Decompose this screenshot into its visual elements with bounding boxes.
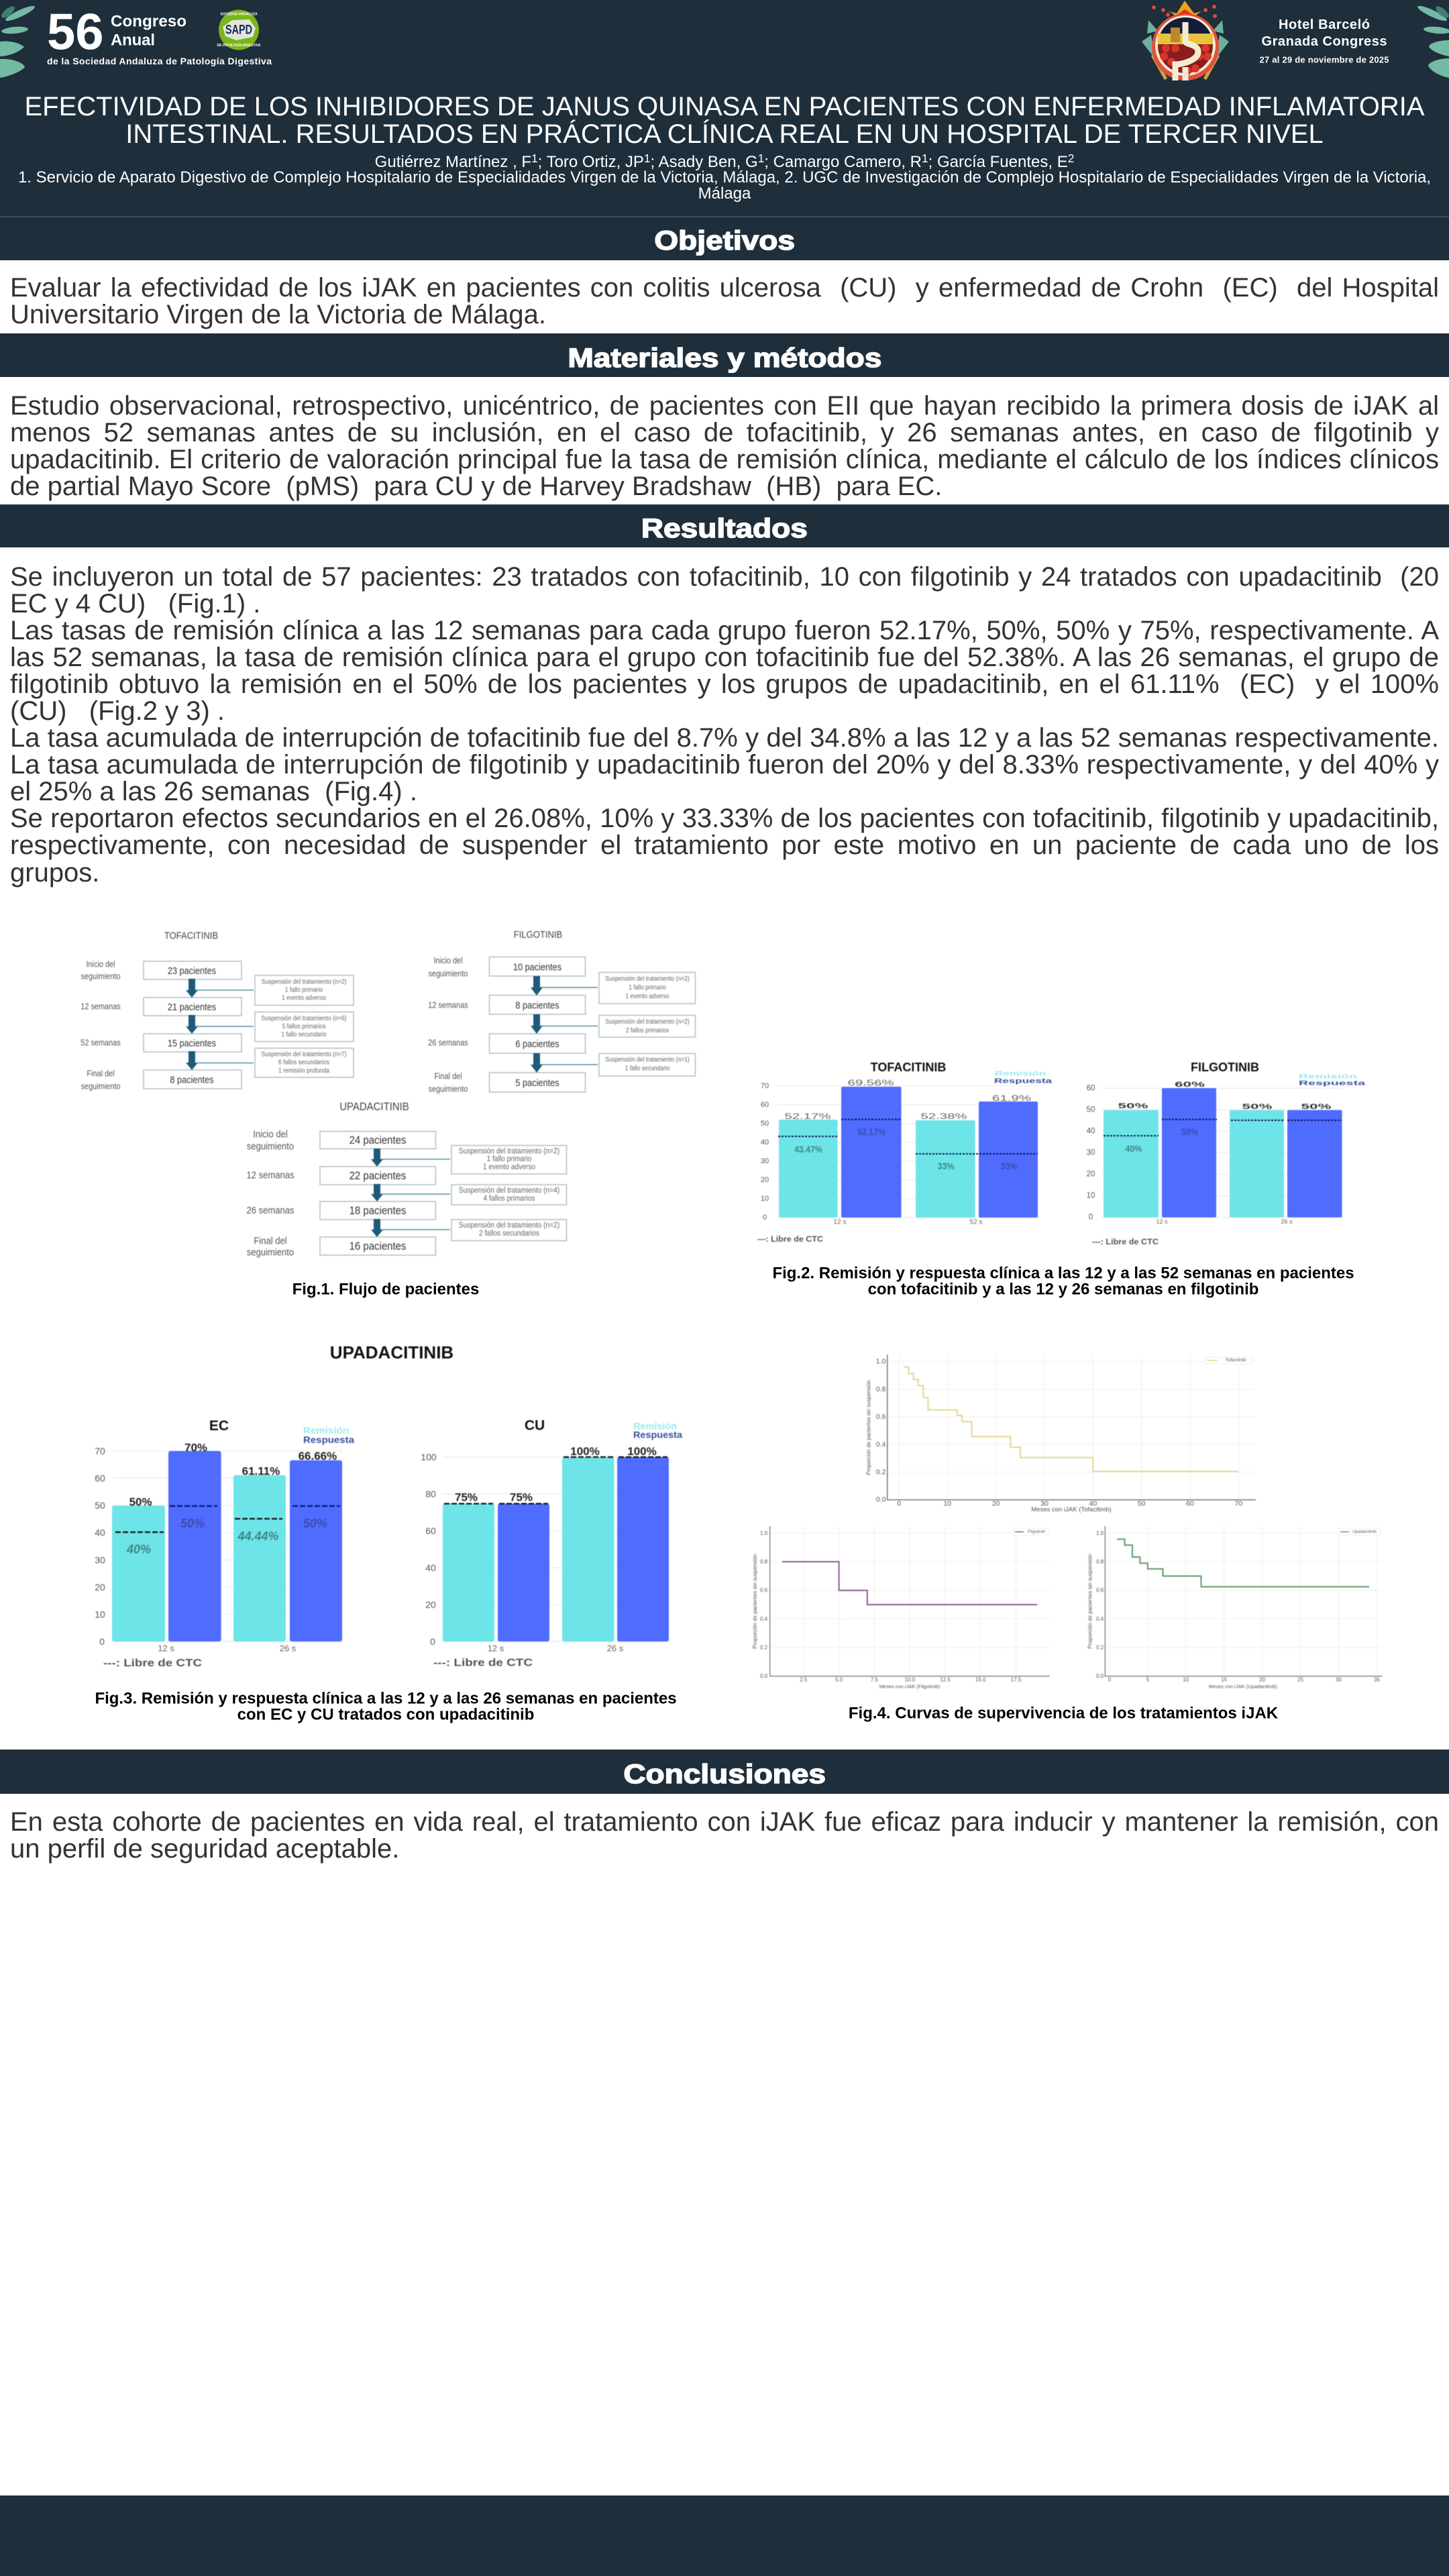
text: materiales y métodos — [10, 391, 1439, 501]
text: resultados: Se incluyeron un total de 57 pacientes: 23 tratados con tofacitinib, 10 con filgotinib y 24 tratados con upadacitinib (20 — [10, 562, 1439, 592]
chart: filgotinib: 50% — [1181, 1126, 1198, 1137]
flow: upadacitinib: 24 pacientes — [350, 1134, 406, 1146]
curve: filgotinib: 0.6 — [760, 1587, 768, 1593]
curve: tofacitinib: 0 — [897, 1500, 901, 1508]
chart: filgotinib — [1087, 1061, 1366, 1246]
curve: tofacitinib: 20 — [992, 1500, 1000, 1508]
text: objetivos — [10, 273, 1439, 329]
flow: tofacitinib: seguimiento — [81, 1081, 121, 1091]
chart: tofacitinib: 52.17% — [785, 1112, 831, 1121]
curve: upadacitinib: 35 — [1374, 1677, 1380, 1682]
curve: filgotinib: Proporción de pacientes sin suspensión — [752, 1554, 758, 1649]
figure 4: survival curves — [752, 1355, 1382, 1689]
flow: filgotinib: Suspensión del tratamiento (n=1) — [605, 1056, 690, 1064]
chart: filgotinib: 12 s — [1156, 1218, 1168, 1225]
text: resultados: La tasa acumulada de interrupción de tofacitinib fue del 8.7% y del 34.8% a las 12 y a las 52 semanas respectivamente. — [10, 723, 1439, 753]
flow: filgotinib: 10 pacientes — [513, 961, 561, 973]
header divider line — [0, 216, 1449, 217]
text: resultados: La tasa acumulada de interrupción de filgotinib y upadacitinib fueron del 20% y del 8.33% respectivamente, y del 40% y — [10, 750, 1439, 780]
heading: Conclusiones: Conclusiones — [623, 1760, 826, 1789]
caption: figure 3: Fig.3. Remisión y respuesta clínica a las 12 y a las 26 semanas en pacientes — [95, 1689, 677, 1708]
poster title — [24, 92, 1425, 149]
curve: upadacitinib: 1.0 — [1096, 1530, 1104, 1536]
flow: tofacitinib: 8 pacientes — [170, 1073, 214, 1085]
chart: tofacitinib: Remisión — [995, 1071, 1046, 1077]
text: materiales y métodos: upadacitinib. El criterio de valoración principal fue la tasa de remisión clínica, mediante el cálculo de los índices clínicos — [10, 445, 1439, 474]
chart: filgotinib: 50% — [1301, 1103, 1332, 1111]
text: resultados: EC y 4 CU) (Fig.1) . — [10, 589, 260, 619]
figure 2: tofacitinib and filgotinib bar charts — [757, 1061, 1366, 1246]
flow: filgotinib: 8 pacientes — [515, 999, 559, 1011]
chart: tofacitinib: TOFACITINIB — [871, 1061, 946, 1074]
curve: tofacitinib: 30 — [1040, 1500, 1049, 1508]
flow: upadacitinib: seguimiento — [247, 1246, 294, 1258]
text: materiales y métodos: Estudio observacional, retrospectivo, unicéntrico, de pacientes con EII que hayan recibido la primera dosis de iJAK al — [10, 391, 1439, 421]
curve: tofacitinib: 0.2 — [876, 1468, 885, 1476]
footer band — [0, 2496, 1449, 2576]
heading: Conclusiones — [0, 1750, 1449, 1794]
chart: CU: 12 s — [488, 1644, 504, 1653]
flow: tofacitinib: Suspensión del tratamiento (n=2) — [262, 978, 346, 986]
flow: tofacitinib: 5 fallos primarios — [282, 1022, 326, 1031]
logo: 56 Congreso Anual: Anual — [111, 31, 155, 50]
chart: filgotinib: 40% — [1126, 1143, 1142, 1154]
chart: CU: 20 — [425, 1599, 436, 1610]
flow: filgotinib: Final del — [434, 1071, 462, 1081]
curve: upadacitinib: 0.0 — [1096, 1673, 1104, 1679]
chart: tofacitinib: 60 — [761, 1101, 769, 1109]
chart: tofacitinib: 52 s — [970, 1218, 982, 1226]
flow: tofacitinib: 1 remisión profunda — [278, 1067, 330, 1075]
curve: upadacitinib: Meses con iJAK (Upadacitinib) — [1209, 1684, 1278, 1689]
curve: filgotinib: 5.0 — [835, 1677, 843, 1682]
curve: tofacitinib: 0.0 — [876, 1496, 885, 1504]
chart: filgotinib: 10 — [1087, 1192, 1095, 1200]
flow: tofacitinib: 21 pacientes — [168, 1001, 216, 1012]
curve: filgotinib: 0.2 — [760, 1645, 768, 1650]
curve: filgotinib: 2.5 — [800, 1677, 808, 1682]
chart: filgotinib: 60% — [1175, 1081, 1205, 1089]
text: resultados: respectivamente, con necesidad de suspender el tratamiento por este motivo en un paciente de cada uno de los — [10, 830, 1439, 860]
text: materiales y métodos: de partial Mayo Score (pMS) para CU y de Harvey Bradshaw (HB) para EC. — [10, 472, 942, 501]
flow: upadacitinib: seguimiento — [247, 1140, 294, 1152]
chart: CU: 75% — [455, 1491, 478, 1504]
chart: tofacitinib: 52.38% — [920, 1112, 967, 1121]
chart: EC: 50% — [303, 1517, 327, 1530]
chart: filgotinib: 50 — [1087, 1106, 1095, 1114]
curve: tofacitinib: Proporción de pacientes sin suspensión — [865, 1380, 872, 1475]
flow: upadacitinib: 18 pacientes — [350, 1205, 406, 1217]
chart: tofacitinib: Respuesta — [994, 1077, 1053, 1085]
chart: EC: 12 s — [158, 1644, 174, 1653]
chart: filgotinib: 26 s — [1281, 1218, 1293, 1225]
chart: CU: 0 — [430, 1636, 435, 1647]
chart: EC: 30 — [95, 1554, 105, 1565]
text: conclusiones: En esta cohorte de pacientes en vida real, el tratamiento con iJAK fue eficaz para inducir y mantener la remisión, con — [10, 1807, 1439, 1837]
text: resultados: (CU) (Fig.2 y 3) . — [10, 696, 225, 726]
curve: tofacitinib — [865, 1355, 1256, 1513]
chart: filgotinib: ---: Libre de CTC — [1092, 1237, 1159, 1246]
chart: CU: 100 — [421, 1452, 437, 1462]
flow: tofacitinib: Inicio del — [86, 959, 115, 969]
flow: tofacitinib: 1 evento adverso — [282, 994, 326, 1002]
chart: EC: 44.44% — [237, 1529, 279, 1543]
caption: figure 2 — [772, 1264, 1354, 1299]
curve: tofacitinib: 50 — [1138, 1500, 1146, 1508]
flow: upadacitinib: Final del — [254, 1234, 287, 1246]
flow: filgotinib: seguimiento — [429, 1083, 468, 1094]
flow: filgotinib: 5 pacientes — [515, 1077, 559, 1088]
affiliations: Málaga — [698, 184, 751, 203]
curve: upadacitinib: 15 — [1221, 1677, 1228, 1682]
curve: upadacitinib: 5 — [1146, 1677, 1150, 1682]
caption: figure 3: con EC y CU tratados con upadacitinib — [237, 1705, 534, 1724]
curve: upadacitinib: 25 — [1297, 1677, 1304, 1682]
chart: EC: 20 — [95, 1582, 105, 1593]
logo: SAPD: SOCIEDAD ANDALUZA — [220, 12, 258, 16]
curve: upadacitinib: 0.8 — [1096, 1559, 1104, 1564]
poster title: INTESTINAL. RESULTADOS EN PRÁCTICA CLÍNICA REAL EN UN HOSPITAL DE TERCER NIVEL — [125, 119, 1324, 149]
icon: left leaves — [0, 3, 36, 78]
chart: CU: 40 — [425, 1562, 436, 1573]
text: resultados: filgotinib obtuvo la remisión en el 50% de los pacientes y los grupos de upadacitinib, en el 61.11% (EC) y el 100% — [10, 669, 1439, 699]
curve: upadacitinib: 10 — [1183, 1677, 1189, 1682]
chart: CU: 100% — [627, 1445, 657, 1458]
flow: upadacitinib: 1 evento adverso — [483, 1163, 535, 1171]
chart: filgotinib: FILGOTINIB — [1191, 1061, 1259, 1074]
flow: upadacitinib: 26 semanas — [246, 1204, 294, 1216]
curve: tofacitinib: 0.4 — [876, 1440, 885, 1448]
curve: upadacitinib: Proporción de pacientes sin suspensión — [1087, 1554, 1093, 1649]
curve: filgotinib: 10.0 — [904, 1677, 916, 1682]
chart: tofacitinib: 69.56% — [848, 1078, 894, 1087]
curve: filgotinib: 0.4 — [760, 1616, 768, 1622]
flow: upadacitinib: 16 pacientes — [350, 1240, 406, 1252]
chart: tofacitinib: 12 s — [834, 1218, 846, 1226]
chart: EC: Remisión — [303, 1425, 349, 1436]
curve: upadacitinib: 30 — [1336, 1677, 1342, 1682]
text: resultados: grupos. — [10, 858, 99, 888]
chart: EC: 66.66% — [299, 1450, 337, 1462]
logo: 56 Congreso Anual — [47, 4, 272, 66]
curve: tofacitinib: 1.0 — [876, 1358, 885, 1366]
flow: upadacitinib: Suspensión del tratamiento (n=2) — [459, 1222, 559, 1230]
chart: EC: 40% — [126, 1543, 151, 1556]
flow: upadacitinib: 4 fallos primarios — [483, 1195, 535, 1203]
authors: Gutiérrez Martínez , F1; Toro Ortiz, JP1; Asady Ben, G1; Camargo Camero, R1; García Fuentes, E2 — [375, 152, 1074, 171]
chart: tofacitinib: 30 — [761, 1157, 769, 1165]
flow: tofacitinib: 52 semanas — [80, 1037, 121, 1048]
chart: tofacitinib: 61.9% — [992, 1093, 1032, 1103]
chart: EC: Respuesta — [303, 1434, 354, 1445]
flow: filgotinib: Suspensión del tratamiento (n=2) — [605, 975, 690, 983]
curve: filgotinib: 1.0 — [760, 1530, 768, 1536]
chart: tofacitinib: 50 — [761, 1120, 769, 1128]
flow: filgotinib: 1 fallo secundario — [625, 1065, 669, 1073]
text: materiales y métodos: menos 52 semanas antes de su inclusión, en el caso de tofacitinib, y 26 semanas antes, en caso de filgotinib y — [10, 418, 1439, 447]
flow: tofacitinib: seguimiento — [81, 971, 121, 981]
chart: tofacitinib: 20 — [761, 1176, 769, 1184]
chart: CU: ---: Libre de CTC — [433, 1657, 533, 1669]
curve: upadacitinib: Upadacitinib — [1352, 1529, 1377, 1534]
flow: upadacitinib: 12 semanas — [246, 1169, 294, 1181]
flow: tofacitinib: Suspensión del tratamiento (n=7) — [262, 1051, 346, 1059]
chart: filgotinib: 0 — [1089, 1214, 1093, 1222]
flow: tofacitinib: 12 semanas — [80, 1001, 121, 1012]
chart: filgotinib: 60 — [1087, 1084, 1095, 1092]
poster title: EFECTIVIDAD DE LOS INHIBIDORES DE JANUS QUINASA EN PACIENTES CON ENFERMEDAD INFLAMATORIA — [24, 92, 1425, 121]
icon: right leaves — [1416, 3, 1449, 78]
flow: upadacitinib — [246, 1101, 566, 1258]
flow: upadacitinib: 2 fallos secundarios — [479, 1230, 539, 1238]
chart: tofacitinib: 52.17% — [857, 1126, 885, 1137]
chart: tofacitinib: 33% — [1001, 1161, 1018, 1171]
curve: filgotinib: 15.0 — [975, 1677, 986, 1682]
curve: upadacitinib: 0 — [1108, 1677, 1112, 1682]
flow: filgotinib: 1 evento adverso — [625, 992, 669, 1001]
flow: upadacitinib: Suspensión del tratamiento (n=2) — [459, 1147, 559, 1156]
curve: tofacitinib: Tofacitinib — [1225, 1358, 1246, 1363]
chart: EC: 60 — [95, 1473, 105, 1484]
heading: upadacitinib: UPADACITINIB — [330, 1342, 453, 1362]
flow: upadacitinib: 22 pacientes — [350, 1170, 406, 1182]
chart: CU: 100% — [570, 1445, 600, 1458]
flow: tofacitinib: TOFACITINIB — [164, 929, 218, 941]
chart: EC: 50% — [129, 1496, 152, 1508]
flow: upadacitinib: UPADACITINIB — [339, 1101, 409, 1113]
chart: filgotinib: 40 — [1087, 1127, 1095, 1135]
flow: tofacitinib: Final del — [87, 1068, 115, 1079]
caption: figure 3 — [95, 1689, 677, 1724]
text: resultados: las 52 semanas, la tasa de remisión clínica para el grupo con tofacitinib fue del 52.38%. A las 26 semanas, el grupo de — [10, 643, 1439, 672]
chart: tofacitinib — [757, 1061, 1053, 1244]
chart: EC: ---: Libre de CTC — [103, 1658, 203, 1669]
curve: upadacitinib: 0.4 — [1096, 1616, 1104, 1622]
curve: filgotinib: 12.5 — [940, 1677, 951, 1682]
heading: Resultados — [0, 504, 1449, 547]
curve: filgotinib — [752, 1526, 1050, 1689]
curve: tofacitinib: 0.8 — [876, 1385, 885, 1393]
flow: tofacitinib — [80, 929, 354, 1091]
curve: tofacitinib: 10 — [943, 1500, 951, 1508]
logo: 56 Congreso Anual: 56 — [47, 4, 104, 60]
curve: tofacitinib: 60 — [1186, 1500, 1194, 1508]
heading: Objetivos: Objetivos — [654, 226, 795, 256]
curve: filgotinib: 0.0 — [760, 1673, 768, 1679]
venue and dates — [1260, 17, 1389, 64]
flow: tofacitinib: 1 fallo secundario — [281, 1030, 327, 1039]
chart: filgotinib: Respuesta — [1299, 1080, 1366, 1087]
chart: CU: 75% — [510, 1491, 533, 1504]
chart: tofacitinib: 70 — [761, 1082, 769, 1090]
caption: figure 4: Fig.4. Curvas de supervivencia de los tratamientos iJAK — [849, 1704, 1279, 1723]
flow: filgotinib: 6 pacientes — [515, 1038, 559, 1049]
text: objetivos: Universitario Virgen de la Victoria de Málaga. — [10, 300, 546, 329]
chart: filgotinib: 50% — [1242, 1103, 1273, 1111]
chart: tofacitinib: ---: Libre de CTC — [757, 1234, 823, 1244]
flow: filgotinib: seguimiento — [429, 968, 468, 979]
heading: Materiales y métodos: Materiales y métodos — [568, 343, 881, 373]
chart: CU: CU — [525, 1418, 545, 1433]
text: resultados: Las tasas de remisión clínica a las 12 semanas para cada grupo fueron 52.17%, 50%, 50% y 75%, respectivamente. A — [10, 616, 1439, 645]
curve: upadacitinib: 0.6 — [1096, 1587, 1104, 1593]
logo: SAPD: SAPD — [225, 23, 252, 38]
figure 1: patient flow — [80, 928, 695, 1258]
flow: filgotinib: 1 fallo primario — [629, 983, 666, 992]
chart: EC: 40 — [95, 1527, 105, 1538]
chart: EC — [95, 1418, 354, 1669]
logo: 56 Congreso Anual: Congreso — [111, 12, 186, 31]
chart: CU: 60 — [425, 1525, 436, 1536]
curve: tofacitinib: 70 — [1235, 1500, 1242, 1508]
logo: SAPD — [217, 9, 261, 50]
flow: filgotinib: Suspensión del tratamiento (n=2) — [605, 1018, 690, 1026]
chart: filgotinib: 50% — [1118, 1102, 1148, 1110]
logo: pomegranate emblem — [1142, 1, 1229, 80]
flow: filgotinib: 12 semanas — [428, 1000, 468, 1010]
chart: filgotinib: 30 — [1087, 1149, 1095, 1157]
venue and dates: 27 al 29 de noviembre de 2025 — [1260, 55, 1389, 64]
curve: upadacitinib — [1087, 1526, 1382, 1689]
chart: EC: 26 s — [280, 1644, 297, 1653]
figure 3: upadacitinib bar charts — [95, 1342, 682, 1669]
curve: filgotinib: 17.5 — [1011, 1677, 1022, 1682]
flow: filgotinib: FILGOTINIB — [514, 928, 562, 940]
chart: CU: Remisión — [633, 1421, 677, 1432]
chart: CU — [421, 1418, 682, 1669]
text: resultados: Se reportaron efectos secundarios en el 26.08%, 10% y 33.33% de los pacientes con tofacitinib, filgotinib y upadacitinib, — [10, 804, 1439, 833]
chart: EC: 50% — [180, 1517, 205, 1530]
chart: filgotinib: Remisión — [1299, 1073, 1357, 1080]
text: objetivos: Evaluar la efectividad de los iJAK en pacientes con colitis ulcerosa (CU) y enfermedad de Crohn (EC) del Hospital — [10, 273, 1439, 303]
curve: upadacitinib: 20 — [1259, 1677, 1266, 1682]
text: conclusiones: un perfil de seguridad aceptable. — [10, 1834, 399, 1864]
venue and dates: Granada Congress — [1261, 34, 1387, 49]
caption: figure 1: Fig.1. Flujo de pacientes — [292, 1280, 479, 1299]
flow: upadacitinib: Suspensión del tratamiento (n=4) — [459, 1187, 559, 1195]
flow: tofacitinib: Suspensión del tratamiento (n=6) — [262, 1014, 346, 1023]
chart: CU: Respuesta — [633, 1429, 682, 1440]
header background — [0, 0, 1449, 260]
logo: 56 Congreso Anual: de la Sociedad Andaluza de Patología Digestiva — [47, 56, 272, 66]
chart: tofacitinib: 10 — [761, 1195, 769, 1203]
curve: tofacitinib: Meses con iJAK (Tofacitinib) — [1031, 1506, 1112, 1513]
flow: filgotinib — [428, 928, 695, 1094]
flow: tofacitinib: 1 fallo primario — [285, 986, 323, 994]
text: conclusiones — [10, 1807, 1439, 1864]
chart: filgotinib: 20 — [1087, 1171, 1095, 1179]
chart: tofacitinib: 40 — [761, 1138, 769, 1146]
chart: EC: EC — [209, 1418, 229, 1434]
curve: upadacitinib: 0.2 — [1096, 1645, 1104, 1650]
chart: EC: 0 — [99, 1636, 105, 1647]
flow: filgotinib: Inicio del — [433, 955, 463, 965]
heading: Resultados: Resultados — [641, 514, 808, 543]
curve: tofacitinib: 40 — [1089, 1500, 1097, 1508]
chart: EC: 61.11% — [242, 1465, 280, 1477]
caption: figure 2: Fig.2. Remisión y respuesta clínica a las 12 y a las 52 semanas en pacientes — [772, 1264, 1354, 1283]
flow: tofacitinib: 23 pacientes — [168, 965, 216, 976]
curve: tofacitinib: 0.6 — [876, 1413, 885, 1421]
logo: SAPD: DE PATOLOGÍA DIGESTIVA — [217, 42, 261, 48]
chart: EC: 10 — [95, 1609, 105, 1619]
chart: CU: 26 s — [607, 1644, 624, 1653]
flow: upadacitinib: 1 fallo primario — [487, 1155, 531, 1163]
flow: tofacitinib: 6 fallos secundarios — [278, 1059, 329, 1067]
chart: tofacitinib: 0 — [763, 1214, 767, 1222]
curve: filgotinib: 0.8 — [760, 1559, 768, 1564]
chart: EC: 70% — [184, 1441, 207, 1454]
curve: filgotinib: Filgotinib — [1028, 1529, 1045, 1534]
affiliations — [18, 168, 1431, 203]
flow: upadacitinib: Inicio del — [253, 1128, 288, 1140]
caption: figure 2: con tofacitinib y a las 12 y 26 semanas en filgotinib — [868, 1280, 1258, 1299]
text: resultados: el 25% a las 26 semanas (Fig.4) . — [10, 777, 417, 806]
chart: EC: 70 — [95, 1446, 105, 1456]
flow: filgotinib: 2 fallos primarios — [626, 1026, 669, 1035]
affiliations: 1. Servicio de Aparato Digestivo de Complejo Hospitalario de Especialidades Virgen de la Victoria, Málaga, 2. UGC de Investigación de Complejo Hospitalario de Especialidades Virgen de la Victoria, — [18, 168, 1431, 186]
flow: tofacitinib: 15 pacientes — [168, 1037, 216, 1049]
curve: filgotinib: Meses con iJAK (Filgotinib) — [879, 1684, 941, 1689]
text: resultados — [10, 562, 1439, 888]
chart: CU: 80 — [425, 1489, 436, 1499]
chart: tofacitinib: 33% — [938, 1161, 955, 1171]
heading: Materiales y métodos — [0, 333, 1449, 377]
flow: filgotinib: 26 semanas — [428, 1037, 468, 1048]
chart: tofacitinib: 43.47% — [794, 1144, 822, 1155]
curve: filgotinib: 7.5 — [871, 1677, 879, 1682]
chart: EC: 50 — [95, 1500, 105, 1511]
venue and dates: Hotel Barceló — [1279, 17, 1370, 32]
